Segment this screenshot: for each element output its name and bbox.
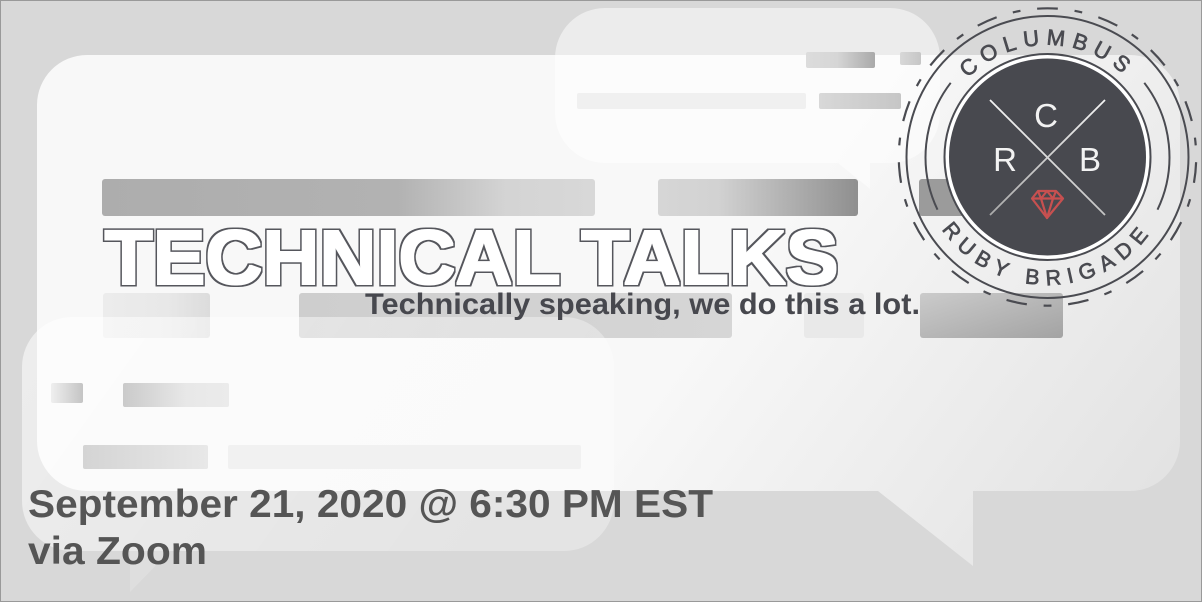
bottom-left speech bubble [22,317,614,592]
title: TECHNICAL TALKS [104,215,838,301]
logo disc [944,54,1150,260]
placeholder bars: large bubble [102,179,1063,338]
logo text: Columbus: COLUMBUS [960,29,1130,75]
logo inner arcs [926,83,1169,210]
top speech bubble [555,8,940,189]
logo outer ring [906,16,1188,298]
placeholder bars: top bubble [577,52,921,109]
logo text: Ruby Brigade: RUBY BRIGADE [942,221,1149,286]
logo gem icon [1032,191,1063,218]
logo crossed lines [990,100,1105,215]
logo initials [993,97,1101,178]
logo outer dashed ring [889,0,1202,316]
logo: Columbus Ruby Brigade [898,7,1198,307]
placeholder bars: bottom-left bubble [51,383,581,469]
logo initials: R [993,141,1017,178]
logo initials: B [1079,141,1101,178]
event date: September 21, 2020 @ 6:30 PM EST [28,483,713,526]
logo initials: C [1034,97,1058,134]
subtitle: Technically speaking, we do this a lot. [365,288,920,321]
event location: via Zoom [28,530,207,573]
